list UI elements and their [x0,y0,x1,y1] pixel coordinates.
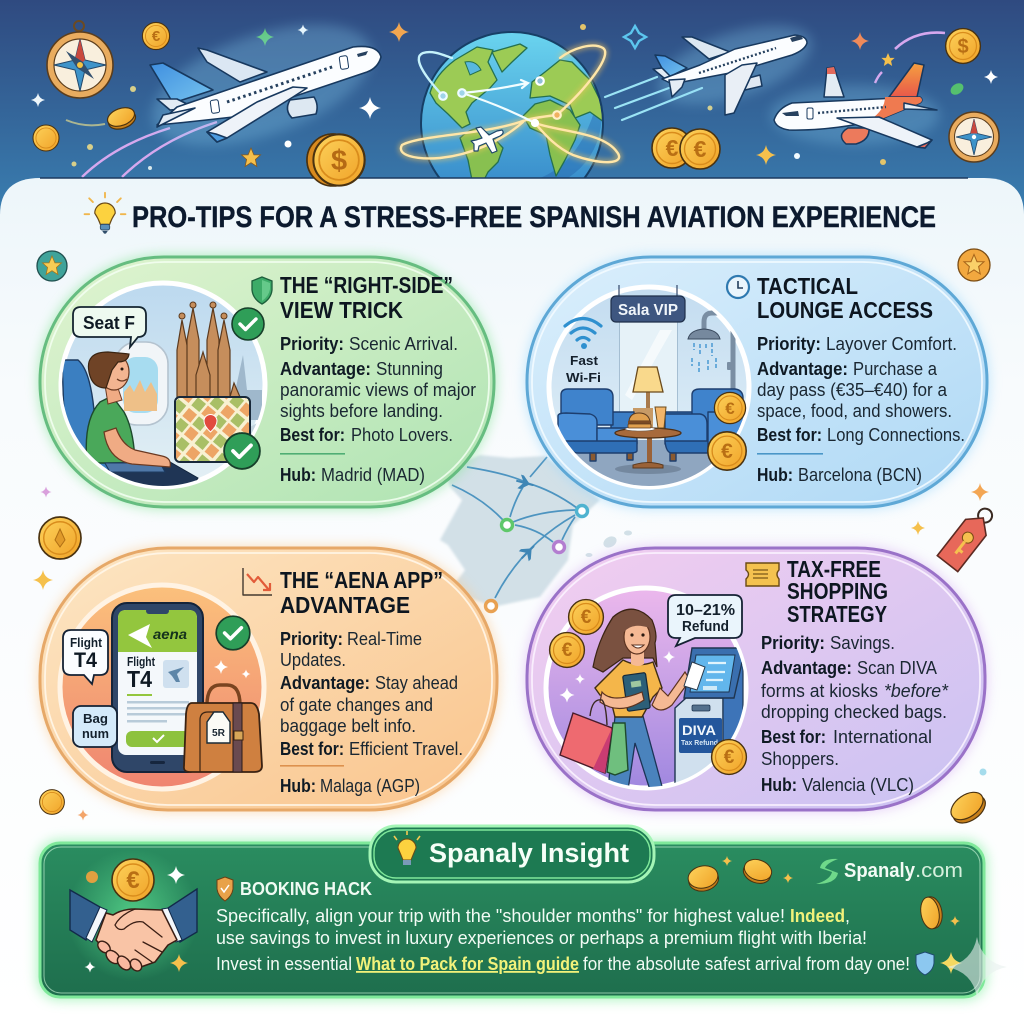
card text: baggage belt info. [280,715,416,736]
icon: euro coin top left [142,22,170,50]
icon: check badge top [232,308,264,340]
card text: Priority: [280,333,344,354]
speech bubble: Flight T4 [63,630,108,684]
speech bubble: Bag num: num [82,726,109,741]
heading: VIEW TRICK [280,297,403,323]
icon: euro coin a [569,600,603,634]
card text: Stunning [376,358,443,379]
icon: shield [252,277,272,304]
illustration: app and bag [60,585,264,789]
aena logo [128,624,152,648]
receipt [684,662,705,690]
card text: Advantage: [280,672,370,693]
card text: Hub: [761,774,797,795]
icon: euro coin lower [708,432,746,470]
illustration: globe with orbits [395,31,625,178]
kiosk panel label [681,722,718,747]
card text: Advantage: [757,358,848,379]
card text [280,628,463,796]
plane box [163,660,189,688]
globe body [422,33,602,178]
icon: dollar coin top right: $ [957,36,969,58]
woman neck [631,652,644,666]
kiosk panel label: Tax Refund [681,738,718,747]
card text: Malaga (AGP) [320,775,420,796]
icon: coin left [33,125,59,151]
icon: blue shield [916,952,934,975]
card text: sights before landing. [280,400,443,421]
sparkles near shopper [560,651,675,702]
logo: Spanaly.com [816,859,963,884]
bag handle [207,685,240,705]
icon: compass left [47,21,113,98]
orbits [401,46,619,162]
illustration: app and bag: T4 [127,666,152,692]
seat [62,360,110,470]
icon: bottom left coin [40,790,64,814]
icon: wifi with label: Fast [570,353,599,368]
Spain silhouette [440,455,600,607]
heading [757,273,933,323]
panel: tactical lounge access [525,255,989,509]
heading: TAX-FREE [787,556,881,582]
card text: Advantage: [761,657,852,678]
flight label: Flight [127,655,156,669]
kiosk lower body [675,698,723,790]
shopping bag red [560,713,612,773]
kiosk panel label: DIVA [682,722,716,738]
man head [105,385,122,404]
man legs and armrest [104,462,199,486]
card text [757,333,965,485]
card pill [525,255,989,509]
glass [655,407,666,428]
man torso [86,396,135,463]
icon: large dollar coin [307,134,365,186]
large dollar coin overlap [307,134,365,186]
woman face [624,620,650,654]
heading: THE “AENA APP” [280,567,443,593]
card text: *before* [884,680,949,701]
icon: bulb [394,831,420,865]
icon: orange star badge [958,249,990,281]
card text: Hub: [280,775,316,796]
icon: euro coins pair [652,128,720,169]
icon: large dollar coin: $ [331,145,347,177]
card text: Efficient Travel. [349,738,463,759]
card text: Advantage: [280,358,371,379]
speech bubble: refund [668,595,742,646]
card text: Best for: [280,424,345,445]
icon: wifi with label [565,318,601,385]
illustration: handshake with coin [67,849,199,981]
icon: gold sparkle [940,952,962,974]
illustration: handshake with coin: € [126,867,140,894]
card text: Best for: [761,726,826,747]
fingers [96,939,144,973]
insight text: Indeed [790,906,845,926]
card text: Priority: [280,628,343,649]
coins in box [686,856,960,930]
hub nodes [486,506,588,612]
icon: coin left middle [39,517,81,559]
header band: sky [0,0,1024,230]
panel: aena app advantage [38,546,499,812]
card text: Layover Comfort. [826,333,957,354]
sign: Sala VIP [611,285,685,322]
icon: euro coin c [712,740,746,774]
sparkles near phone [214,660,250,678]
small sparkles [33,483,989,820]
insight text: Specifically, align your trip with the "shoulder months" for highest value! [216,906,785,926]
logo: Spanaly.com: .com [915,860,963,882]
icon: teal star badge [37,251,67,281]
icon: euro coin top left: € [152,28,161,45]
insight pill header [370,826,654,882]
illustration: airplane right [770,63,940,148]
heading [787,556,888,627]
left armchair [558,389,637,461]
card text: Priority: [761,632,825,653]
insight pill header: Spanaly Insight [429,838,629,868]
route plane mark upper [514,474,536,492]
icon: check badge [216,616,250,650]
thumb and grip lines [115,909,162,962]
card text: Priority: [757,333,821,354]
card text: International [833,726,932,747]
city map card [175,397,250,462]
woman torso [595,660,662,717]
speech bubble: refund: Refund [682,618,729,635]
card text: Valencia (VLC) [802,774,914,795]
card text: Real-Time [347,628,422,649]
sign: Sala VIP: Sala VIP [618,302,678,319]
shower [704,313,733,395]
card text: Updates. [280,649,346,670]
card text: forms at kiosks [761,680,878,701]
right armchair [665,389,745,461]
icon: euro coin b [550,633,584,667]
bag tag [207,712,230,743]
woman arm reaching [652,672,690,710]
sleeves [70,890,100,940]
icon: clock [727,276,749,298]
logo: Spanaly.com: Spanaly [844,860,916,882]
icon: euro coin c: € [724,747,735,768]
card text: Madrid (MAD) [321,464,425,485]
passport [623,673,650,711]
card text: day pass (€35–€40) for a [757,379,948,400]
Balearic islands [586,530,632,557]
icon: title light bulb [85,193,125,234]
speech bubble: Bag num: Bag [83,711,108,726]
sparkles and dots [31,22,998,170]
icon: compass right [949,112,999,162]
card text: dropping checked bags. [761,701,947,722]
card text: Stay ahead [375,672,458,693]
speech bubble: Bag num [73,706,117,747]
insight text: What to Pack for Spain guide [356,954,579,974]
icon: trending down chart [243,568,272,595]
icon: euro coin lower: € [721,440,733,463]
woman hair [593,609,657,672]
illustration: app and bag: 5R [212,728,226,739]
card text: Scan DIVA [857,657,938,678]
speech bubble: Flight T4: Flight [70,636,103,650]
card text: Hub: [757,464,793,485]
card text: Best for: [280,738,344,759]
illustration: airplane middle [649,10,821,120]
speech bubble: Seat F: Seat F [83,313,135,333]
card text: of gate changes and [280,694,433,715]
heading: ADVANTAGE [280,592,410,618]
icon: tilted coin [105,104,138,133]
phone [112,603,203,772]
illustration: VIP lounge [549,287,749,490]
insight box [37,840,987,1000]
watermark sparkle [947,937,1007,997]
icon: euro coins pair: € [694,136,707,162]
speech bubble: refund: 10–21% [676,602,735,619]
icon: euro coin upper [714,392,746,424]
card text [280,333,476,485]
icon: euro coin b: € [562,640,573,661]
insight text: use savings to invest in luxury experiences or perhaps a premium flight with Iberia! [216,928,867,948]
orbit glow [401,46,619,162]
icon: white plane on globe [471,127,503,153]
card text: Savings. [830,632,895,653]
panel top rule [40,177,968,179]
card text: Hub: [280,464,316,485]
lamp [646,392,650,408]
shopping bag green [607,723,628,775]
icon: red luggage tag with key [937,502,1000,572]
illustration: passenger at window [61,283,265,490]
woman forearm [600,692,644,709]
Sagrada Familia towers [177,308,240,397]
panel: Spanaly Insight [37,826,1007,1000]
icon: bottom right tilted coin [946,787,990,829]
insight text: , [845,906,850,926]
panel: tax-free shopping strategy [525,546,987,812]
plate [625,427,655,431]
illustration: shopper at kiosk [546,588,746,790]
illustrated header [31,0,999,214]
icon: ticket [746,563,779,586]
icon: orange shield [217,877,233,901]
illustration: airplane left [137,0,387,170]
speech bubble: Flight T4: T4 [74,649,97,672]
card text: space, food, and showers. [757,400,952,421]
heading: LOUNGE ACCESS [757,297,933,323]
icon: euro coins pair: € [666,135,679,161]
route plane mark lower [517,541,539,563]
table [647,438,652,462]
card text: Long Connections. [827,424,965,445]
card text: Photo Lovers. [351,424,453,445]
shopping bag handles [590,700,607,725]
decorations around cards [33,249,1000,829]
trails: purple [82,33,945,177]
kiosk screen [690,655,735,692]
card pill [38,255,496,509]
hands [96,909,177,968]
icon: dollar coin top right [946,29,980,63]
window [115,342,168,425]
screen rows [127,694,189,722]
decorative map of Spain with routes [440,455,632,612]
insight text [216,906,910,974]
illustration: app and bag: aena [153,626,187,642]
speech bubble: Seat F [73,307,146,347]
button [126,731,190,747]
card pill [525,546,987,812]
bag body [184,703,262,772]
man arm [104,428,170,467]
card text: Shoppers. [761,748,839,769]
heading: TACTICAL [757,273,858,299]
heading [280,272,453,323]
woman jeans [608,716,663,790]
floor [566,440,712,486]
insight text: for the absolute safest arrival from day one! [583,954,910,974]
icon: check badge bottom [224,433,260,469]
panel: right-side view trick [38,255,496,509]
heading: SHOPPING [787,578,888,604]
distant spire [235,355,262,420]
light trails behind middle plane [605,77,702,120]
card text [761,632,949,795]
swoosh under compass [66,120,105,125]
card text: Barcelona (BCN) [798,464,922,485]
card text: Purchase a [853,358,938,379]
kiosk upper housing [684,648,743,698]
route nodes [439,77,561,126]
booking hack heading: BOOKING HACK [240,879,372,899]
burger [629,413,650,421]
insight text: Invest in essential [216,954,352,974]
kiosk side [722,662,744,740]
card text: Best for: [757,424,822,445]
globe outline [421,32,603,214]
route lines [452,457,577,598]
card text: panoramic views of major [280,379,476,400]
large dollar coin overlap: $ [331,145,347,177]
heading: STRATEGY [787,601,887,627]
heading: THE “RIGHT-SIDE” [280,272,453,298]
icon: wifi with label: Wi-Fi [566,370,601,385]
icon: euro coin upper: € [725,399,735,418]
icon: euro coin a: € [581,607,592,628]
card pill [38,546,499,812]
glass wall [619,322,678,412]
card text: Scenic Arrival. [349,333,458,354]
heading [280,567,443,618]
